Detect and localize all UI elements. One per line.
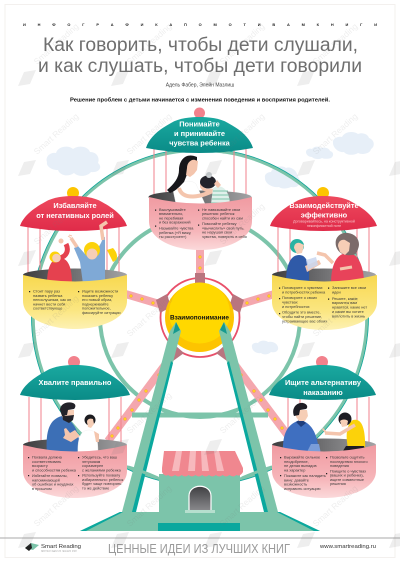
gondola text: об ошибках и неудачах — [32, 483, 74, 487]
gondola text: показать ребенку — [82, 294, 113, 298]
watermarks: Smart Reading — [311, 483, 360, 528]
subtitle: Решение проблем с детьми начинается с изменения поведения и восприятия родителей. — [70, 96, 330, 104]
gondola text: ты расстроен») — [159, 235, 187, 239]
gondola text: ищите совместные — [330, 478, 364, 482]
gondola title: от негативных ролей — [36, 211, 114, 220]
ferris wheel frame — [32, 148, 368, 531]
gondola title — [36, 201, 114, 220]
gondola text: чтобы найти решение, — [282, 315, 322, 319]
gondola text: решения: ребенок — [202, 212, 235, 216]
gondola text — [279, 286, 367, 323]
gondola text: чувства, поверить в себя — [202, 235, 247, 239]
gondola text: воплотить в жизнь — [332, 314, 365, 318]
clouds — [47, 132, 374, 354]
gondola text: Поговорите о своих — [282, 296, 317, 300]
gondola poles — [154, 143, 246, 203]
gondola roof — [20, 365, 130, 400]
hub label: Взаимопонимание — [170, 316, 230, 322]
gondola text: вину: давайте — [284, 478, 309, 482]
gondola: understand feelings — [146, 108, 253, 250]
wheel rims — [32, 148, 368, 486]
gondola text: нравятся, какие нет — [332, 306, 367, 310]
gondola text: Убедитесь, что ваш — [82, 456, 117, 460]
gondola text — [280, 456, 368, 491]
gondola basket — [149, 197, 252, 250]
figures: father and daughter — [47, 402, 99, 454]
gondola text: его новый образ, — [82, 298, 112, 302]
website: www.smartreading.ru — [319, 544, 376, 550]
gondola text: энтузиазм — [82, 460, 101, 464]
figures: child and woman — [47, 222, 117, 284]
gondola basket — [272, 445, 376, 498]
gondola text: и потребностях ребенка — [282, 290, 326, 294]
authors: Адель Фабер, Элейн Мазлиш — [166, 82, 234, 88]
gondola text: с желаниями ребенка — [82, 468, 122, 472]
watermarks: Smart Reading — [125, 21, 174, 66]
gondola text: «вычислить» свой путь, — [202, 226, 244, 230]
gondola poles — [288, 397, 369, 450]
gondola text: Обсудите это вместе, — [282, 310, 321, 314]
title — [38, 35, 362, 77]
gondola text: идеи — [332, 290, 341, 294]
watermarks: Smart Reading — [125, 111, 174, 156]
gondola basket — [272, 275, 377, 330]
gondola text: соразмерен — [82, 464, 103, 468]
gondola text: поведения — [330, 464, 349, 468]
gondola roof — [270, 196, 377, 231]
gondola text: начнет вести себя — [33, 302, 65, 306]
watermarks: Smart Reading — [125, 483, 174, 528]
logo icon — [25, 543, 39, 551]
gondola text: возрасту — [32, 464, 48, 468]
watermarks: Smart Reading — [125, 390, 174, 435]
gondola text: в прошлом — [32, 487, 52, 491]
gondola text: Поищите о чувствах — [330, 469, 366, 473]
gondola: alternative to punishment — [269, 356, 376, 498]
watermarks: Smart Reading — [32, 293, 81, 338]
watermarks: Smart Reading — [218, 201, 267, 246]
gondola text: Поговорите о чувствах — [282, 286, 323, 290]
figures: father and son — [283, 403, 367, 454]
gondola interior — [272, 268, 376, 282]
footer: Ценные идеи из лучших книг — [41, 550, 77, 552]
gondola subtitle: Договаривайтесь, на конструктивной — [293, 220, 355, 224]
gondola text: неодобрение, — [284, 460, 309, 464]
cross beam — [132, 412, 268, 418]
gondola text: положительное, — [82, 307, 111, 311]
gondola: interact effectively — [270, 187, 377, 330]
kicker heading: И Н Ф О Г Р А Ф И К А П О М О Т И В А М К Н И Г И — [23, 22, 377, 27]
gondola roof — [20, 196, 127, 231]
gondola text: Позвольте ощутить — [330, 456, 364, 460]
gondola text: и какие вы хотите — [332, 310, 364, 314]
gondola text: Покажите как наладить — [284, 474, 326, 478]
gondola text: Не навязывайте свои — [202, 208, 240, 212]
logo text: Smart Reading — [41, 544, 81, 550]
gondola interior — [23, 268, 127, 282]
gondola text: подчеркивайте — [82, 302, 109, 306]
gondola title — [169, 120, 231, 148]
watermarks: Smart Reading — [125, 293, 174, 338]
gondola text: будет чаще повторять — [82, 482, 121, 486]
gondola: praise correctly — [20, 356, 130, 498]
gondola title: Избавляйте — [53, 201, 97, 210]
gondola text: то же действие — [82, 486, 109, 490]
gondola basket — [23, 445, 127, 498]
watermarks: Smart Reading — [218, 21, 267, 66]
gondola text: последствия плохого — [330, 460, 368, 464]
awning — [162, 451, 243, 476]
gondola roof — [146, 117, 253, 153]
gondola text: возможность — [284, 483, 307, 487]
gondola text: фиксируйте ситуации — [82, 311, 121, 315]
gondola text: Ищите возможности — [82, 290, 118, 294]
gondola text: и потребностях — [282, 305, 310, 309]
gondola text: Помогайте ребенку — [202, 222, 237, 226]
watermarks: Smart Reading — [311, 111, 360, 156]
house wall — [159, 474, 240, 523]
door — [189, 486, 211, 511]
gondola interior — [272, 438, 376, 452]
footer — [0, 538, 400, 556]
gondola title: и принимайте — [174, 129, 225, 138]
gondola title — [289, 201, 359, 220]
gondola text: Решите, какие — [332, 297, 358, 301]
gondola interior — [148, 190, 252, 204]
gondola title — [285, 378, 362, 397]
gondola text — [155, 208, 247, 239]
watermarks: Smart Reading — [32, 111, 81, 156]
gondola text: соответствовать — [32, 460, 61, 464]
gondola text: чувствах — [282, 300, 298, 304]
hub — [156, 273, 244, 361]
gondola text: избирательно: ребенок — [82, 478, 124, 482]
gondola poles — [29, 397, 121, 450]
gondola text: на характер — [284, 468, 305, 472]
title: Как говорить, чтобы дети слушали, — [43, 35, 358, 56]
watermarks: Smart Reading — [311, 293, 360, 338]
footer slogan: ЦЕННЫЕ ИДЕИ ИЗ ЛУЧШИХ КНИГ — [108, 542, 290, 556]
watermarks: Smart Reading — [32, 21, 81, 66]
gondola text: Избегайте похвалы, — [32, 474, 68, 478]
gondola title: Ищите альтернативу — [285, 378, 362, 387]
gondola subtitle — [293, 220, 355, 228]
gondola text: варианты вам — [332, 301, 357, 305]
gondola text: (ваших и ребенка), — [330, 474, 364, 478]
gondola text: способен найти их сам — [202, 216, 243, 220]
gondola text: Похвала должна — [32, 456, 62, 460]
gondola text: назвать ребенка — [33, 294, 63, 298]
figures: girl and woman — [286, 233, 364, 284]
gondola text: напоминающей — [32, 478, 60, 482]
gondola text: Выслушивайте — [159, 208, 186, 212]
gondola text — [28, 456, 124, 491]
gondola text: не нарушая свои — [202, 231, 232, 235]
gondola text: и способностям ребенка — [32, 468, 77, 472]
gondola text — [29, 290, 121, 315]
gondola text: ребенка («Я вижу, — [159, 231, 191, 235]
gondola text: не перебивая — [159, 216, 183, 220]
gondola text: Стоит пару раз — [33, 290, 60, 294]
gondola title: Понимайте — [179, 120, 220, 128]
gondola text: устраивающее вас обоих — [282, 319, 327, 323]
gondola poles — [28, 223, 119, 281]
watermarks: Smart Reading — [218, 483, 267, 528]
gondola text: Называйте чувства — [159, 227, 194, 231]
gondola roof — [269, 365, 376, 400]
gondola title: чувства ребенка — [169, 138, 231, 148]
gondola poles — [278, 222, 369, 280]
gondola text: Запишите все свои — [332, 286, 366, 290]
pink spokes — [108, 248, 292, 441]
gondola text: Выражайте сильное — [284, 456, 320, 460]
gondola text: исправить ситуацию — [284, 487, 321, 491]
watermarks: Smart Reading — [218, 111, 267, 156]
ticket house — [158, 451, 243, 531]
watermarks: Smart Reading — [218, 390, 267, 435]
gondola text: решения — [330, 482, 346, 486]
gondola text: и без возражений — [159, 221, 191, 225]
gondola text: непослушным, как он — [33, 298, 71, 302]
figures: mother and child — [167, 155, 230, 204]
support legs — [122, 322, 278, 512]
gondola subtitle: неконфликтной ноте — [307, 224, 341, 228]
gondola basket — [23, 275, 127, 329]
gondola text: не делая выпадов — [284, 464, 317, 468]
gondola title: Хвалите правильно — [39, 378, 112, 387]
gondola text: соответствующе — [33, 307, 62, 311]
base — [80, 512, 320, 531]
gondola title: наказанию — [303, 388, 343, 397]
gondola title: эффективно — [301, 210, 348, 220]
gondola title: Взаимодействуйте — [289, 201, 359, 210]
gondola interior — [23, 438, 127, 452]
watermarks: Smart Reading — [32, 201, 81, 246]
watermarks: Smart Reading — [311, 21, 360, 66]
gondola text: Используйте похвалу — [82, 474, 120, 478]
title: и как слушать, чтобы дети говорили — [38, 56, 362, 77]
watermarks: Smart Reading — [32, 483, 81, 528]
gondola: negative roles — [20, 187, 127, 329]
gondola text: внимательно, — [159, 212, 183, 216]
spoke lights — [110, 256, 290, 438]
